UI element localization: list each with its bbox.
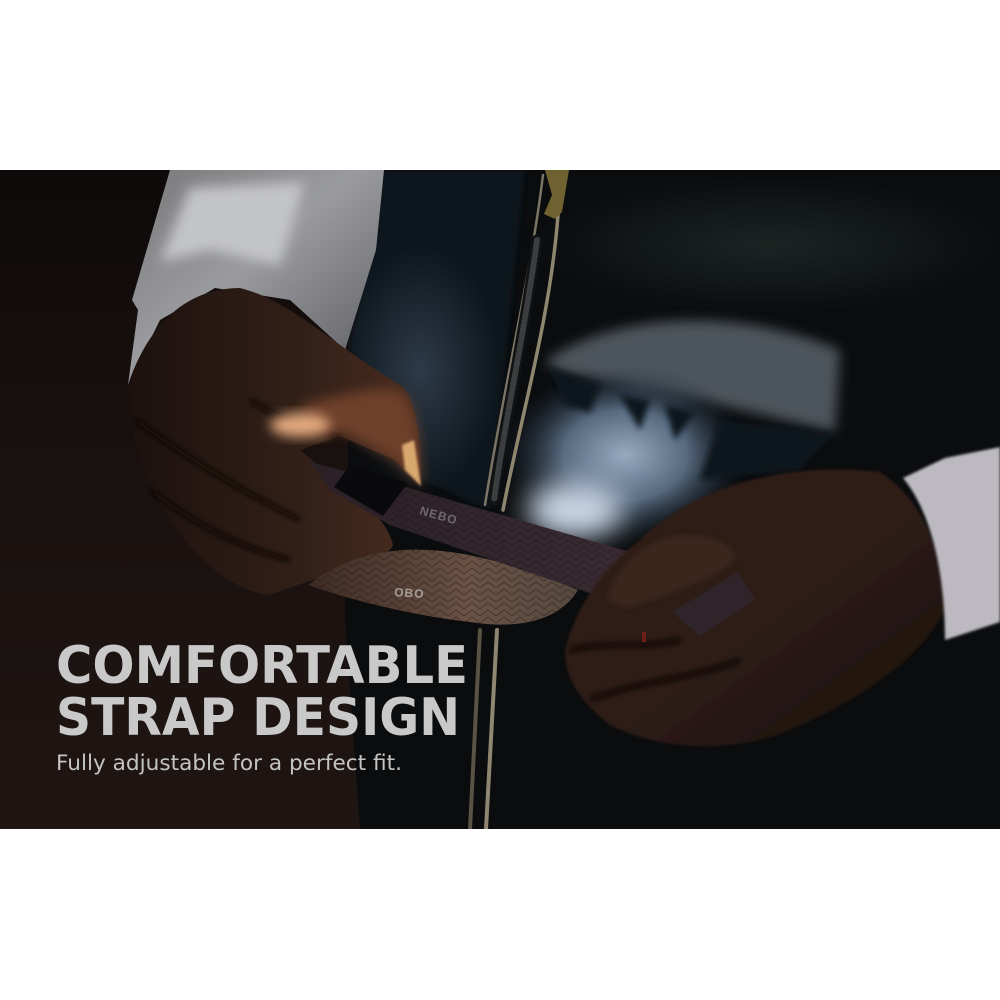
vest glow — [510, 375, 733, 538]
zipper pull — [544, 170, 569, 219]
zipper trim — [470, 175, 558, 829]
subheading: Fully adjustable for a perfect fit. — [56, 751, 402, 775]
vest illuminated quilt upper — [545, 320, 840, 432]
strap upper band pattern — [391, 490, 626, 592]
right thumb — [608, 535, 734, 608]
heading line 2: STRAP DESIGN — [56, 688, 460, 748]
fingertip highlight — [402, 440, 421, 486]
left dark backdrop — [0, 308, 360, 829]
left sleeve — [128, 170, 384, 385]
left hand — [128, 288, 421, 595]
vest left panel — [350, 170, 525, 510]
sleeve bright highlight — [160, 182, 305, 265]
left hand fingers shading — [135, 400, 340, 560]
vest quilt seam shadows — [550, 368, 835, 480]
vest brightest glow near strap — [527, 482, 623, 538]
strap buckle — [334, 465, 408, 516]
red indicator light — [642, 632, 646, 642]
strap lower loop pattern — [308, 550, 578, 625]
right hand — [565, 469, 945, 746]
right hand knuckle lines — [570, 640, 740, 700]
panel: photo of hands adjusting headlamp strap — [0, 170, 1000, 829]
index finger tone — [300, 390, 421, 486]
heading line 1: COMFORTABLE — [56, 636, 468, 696]
vest body — [345, 440, 365, 829]
strap logo upper: NEBO — [418, 503, 459, 528]
thumb glow — [270, 413, 330, 437]
vest upper right sheen — [610, 199, 929, 292]
strap end in right hand — [672, 572, 755, 636]
strap lower loop — [308, 550, 578, 625]
photo background — [0, 170, 1000, 829]
strap logo lower: OBO — [394, 585, 425, 601]
vest left panel sheen — [354, 268, 485, 470]
right sleeve cuff — [903, 447, 1000, 640]
strap upper band — [310, 462, 630, 600]
